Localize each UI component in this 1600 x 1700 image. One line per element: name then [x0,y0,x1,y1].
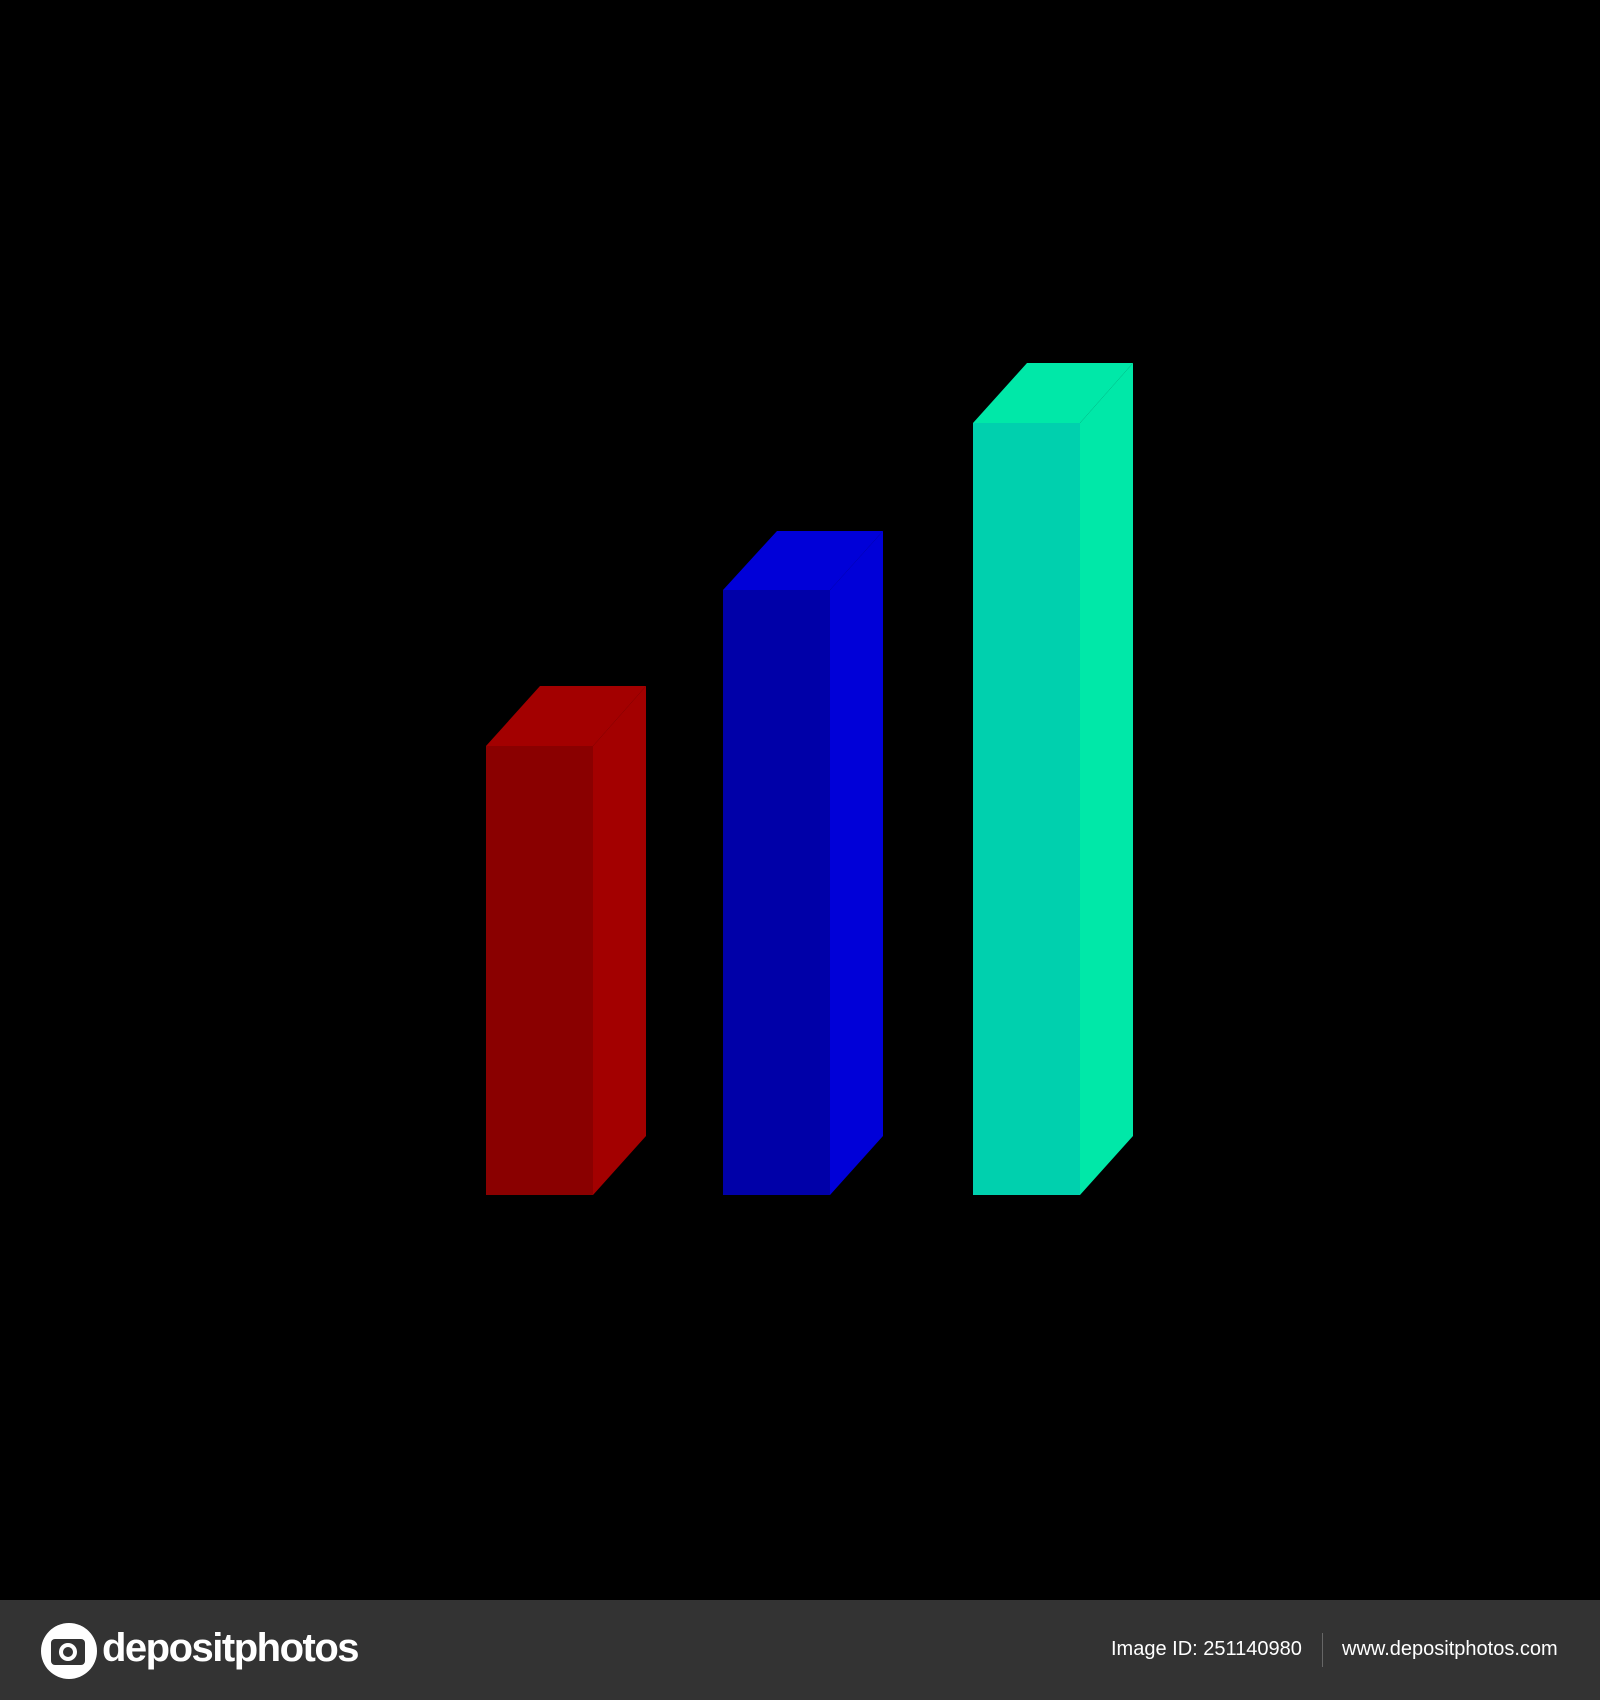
red bar [486,686,646,1195]
footer [0,1600,1600,1700]
green bar [973,363,1133,1195]
logo [41,1623,358,1679]
logo text: depositphotos [102,1626,358,1670]
icon: camera [41,1623,97,1679]
image id: Image ID: 251140980 [1111,1638,1302,1660]
website: www.depositphotos.com [1342,1638,1558,1660]
blue bar [723,531,883,1195]
